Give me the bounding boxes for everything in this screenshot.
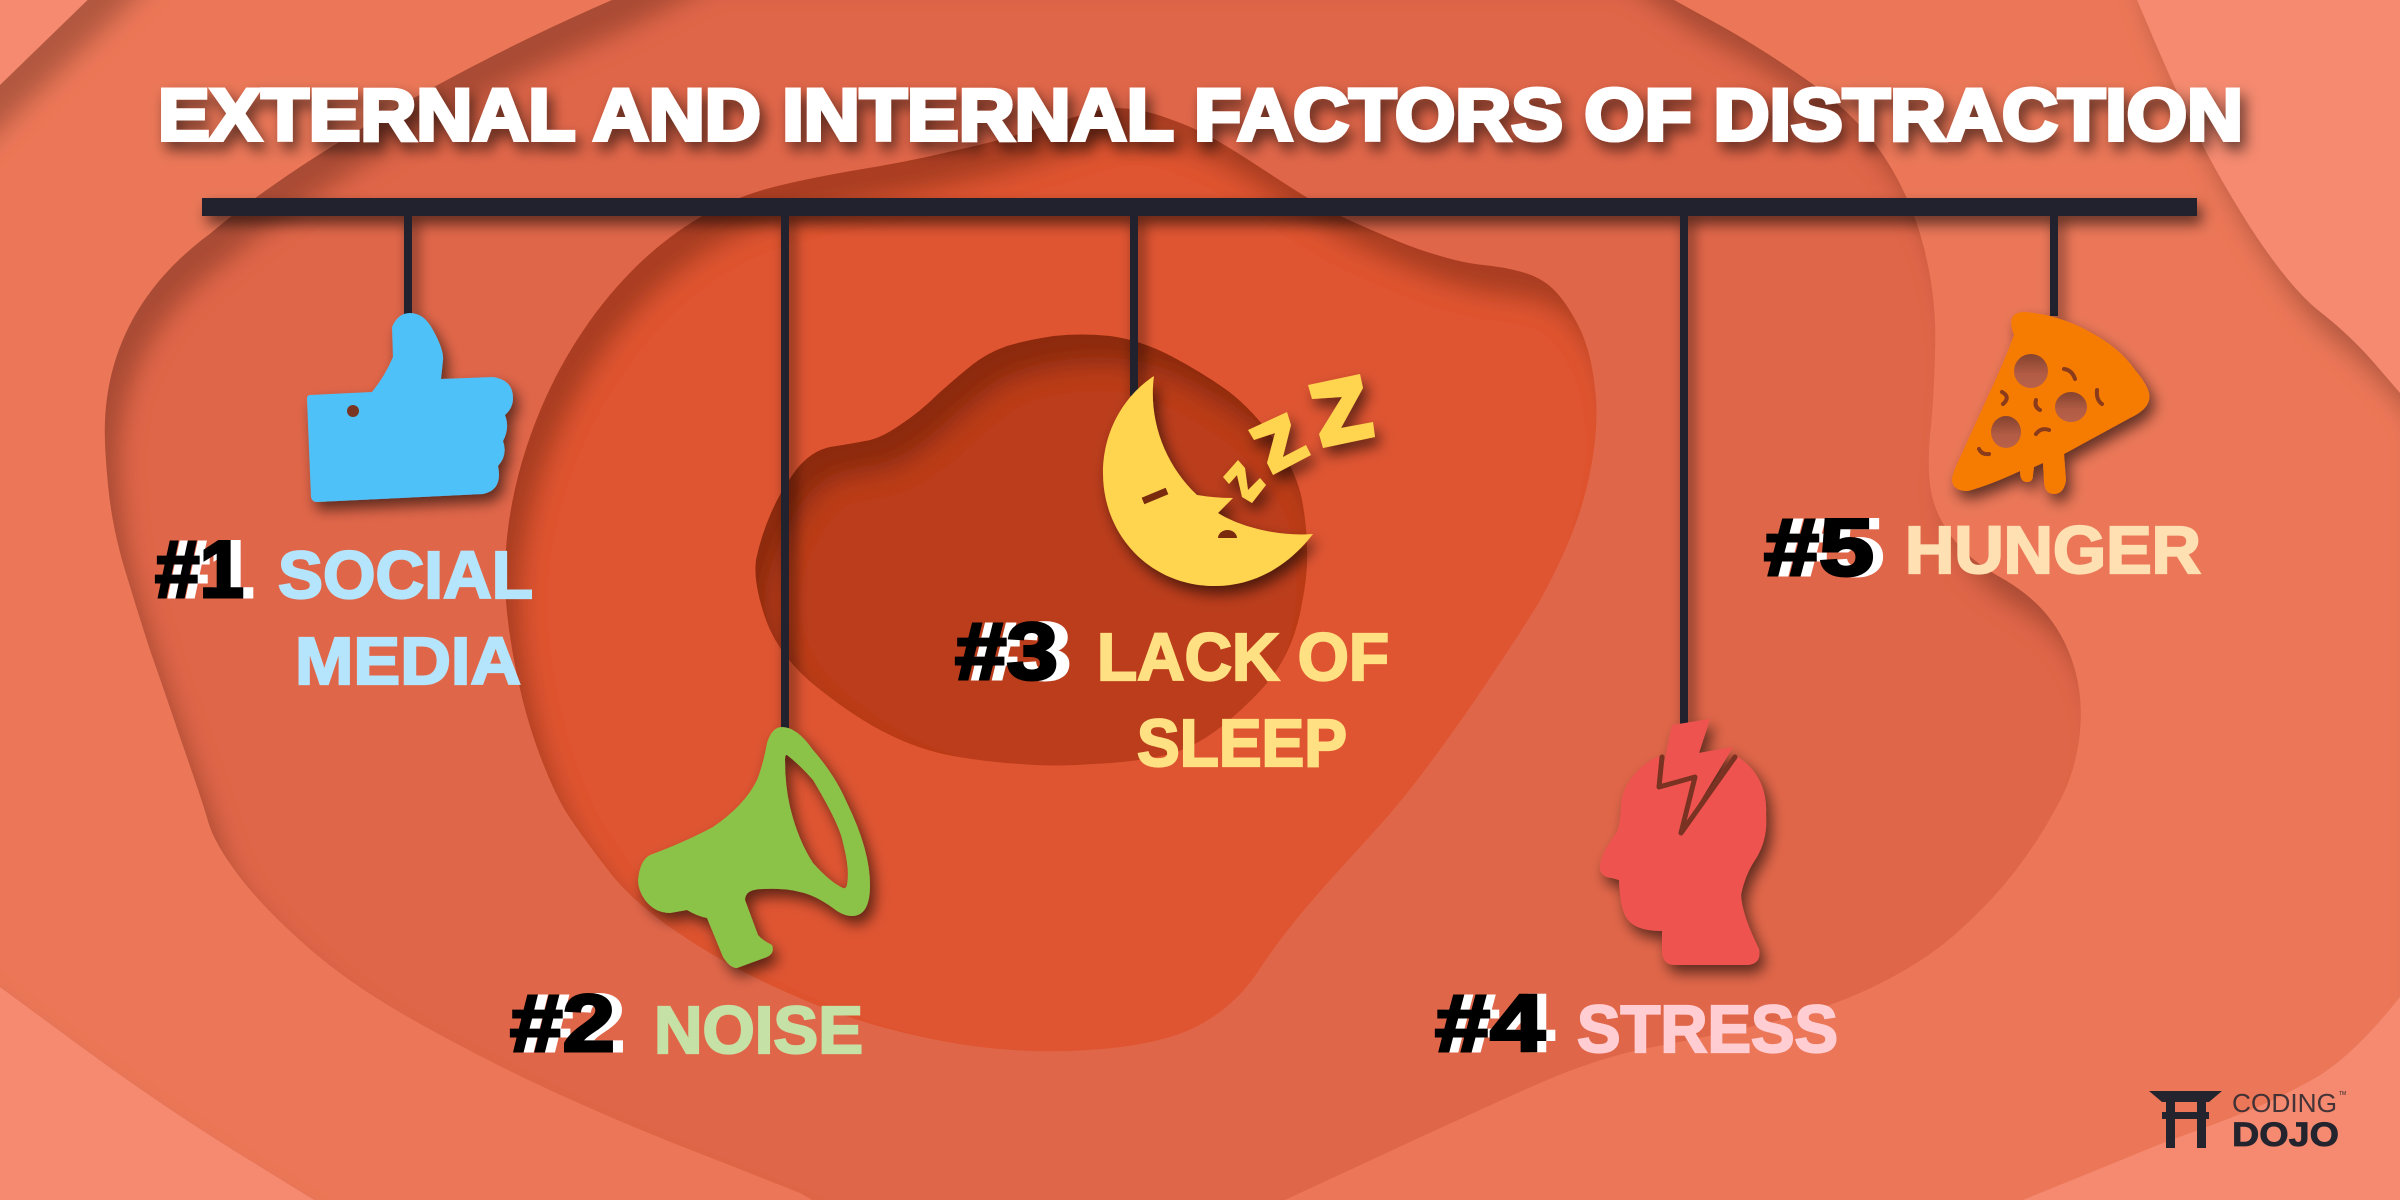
label: #1 social media: #1 [155, 525, 244, 615]
label: #5 hunger: HUNGER [1905, 513, 2201, 588]
label: #5 hunger: #5 [1774, 503, 1884, 593]
label: #4 stress: STRESS [1577, 992, 1838, 1067]
label: #1 social media [155, 525, 533, 699]
label: #3 lack of sleep: LACK OF [1097, 620, 1389, 695]
label: #2 noise: NOISE [654, 993, 863, 1068]
logo: coding dojo: DOJO [2232, 1116, 2339, 1154]
label: #4 stress: #4 [1435, 979, 1545, 1069]
label: #5 hunger [1764, 503, 2201, 593]
label: #3 lack of sleep: #3 [968, 607, 1071, 697]
logo: coding dojo: TM [2339, 1091, 2346, 1097]
label: #1 social media: #1 [165, 525, 254, 615]
icon: pizza slice [1952, 312, 2149, 494]
icon: megaphone [638, 727, 870, 968]
label: #1 social media: SOCIAL [278, 538, 533, 613]
hanging rail and strings [202, 198, 2197, 728]
label: #2 noise: #2 [510, 979, 615, 1069]
logo: coding dojo: CODING [2232, 1088, 2337, 1118]
label: #2 noise: #2 [520, 979, 625, 1069]
label: #1 social media: MEDIA [295, 624, 521, 699]
icon: sleeping moon [1103, 374, 1375, 586]
icon: thumbs up [307, 313, 513, 502]
label: #3 lack of sleep: SLEEP [1137, 706, 1347, 781]
icon: head with lightning bolt [1600, 719, 1766, 965]
title: EXTERNAL AND INTERNAL FACTORS OF DISTRACTION [158, 75, 2243, 156]
label: #3 lack of sleep [955, 607, 1389, 781]
label: #4 stress [1435, 979, 1838, 1069]
label: #3 lack of sleep: #3 [955, 607, 1058, 697]
label: #2 noise [510, 979, 863, 1069]
paper layer 4 [755, 334, 1307, 766]
label: #5 hunger: #5 [1764, 503, 1874, 593]
logo: coding dojo [2149, 1088, 2346, 1154]
paper layer 3 [505, 108, 1596, 1051]
label: #4 stress: #4 [1444, 979, 1554, 1069]
